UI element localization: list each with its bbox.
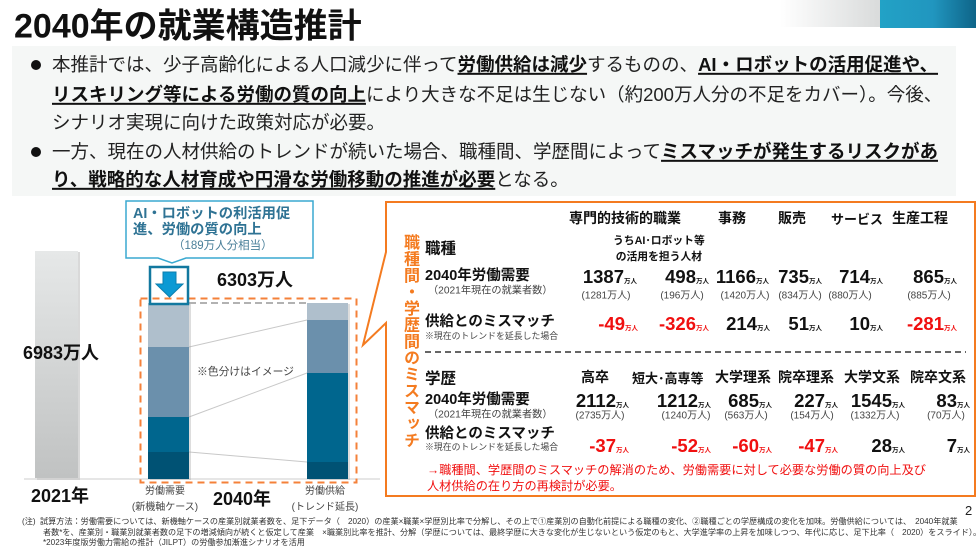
label: supply bar: 労働供給 <box>305 486 345 497</box>
occupation demand values: (880万人) <box>828 290 872 302</box>
education demand values: 685万人 <box>728 390 772 411</box>
occupation demand values: 865万人 <box>913 266 957 287</box>
education mismatch values <box>589 435 970 456</box>
AI robot subcolumn note <box>613 234 705 263</box>
footnote: *2023年度版労働力需給の推計（JILPT）の労働参加漸進シナリオを活用 <box>43 538 305 547</box>
title: 2040年の就業構造推計 <box>14 7 362 45</box>
text: bullet 2 line 1: 一方、現在の人材供給のトレンドが続いた場合、職種間、学歴間によってミスマッチが発生するリスクがあ <box>52 141 938 162</box>
label: supply bar <box>292 485 358 513</box>
occupation demand values: 714万人 <box>839 266 883 287</box>
footnote <box>22 517 976 547</box>
2021 bar <box>35 251 80 480</box>
education demand values: (70万人) <box>927 410 965 422</box>
education demand row label: 2040年労働需要 <box>425 392 530 408</box>
callout text: 進、労働の質の向上 <box>133 222 262 238</box>
education table <box>425 369 970 456</box>
occupation mismatch values: 51万人 <box>788 313 822 334</box>
bullet 2 marker <box>31 147 41 157</box>
callout text: AI・ロボットの利活用促 <box>133 206 290 222</box>
conclusion text in red: →職種間、学歴間のミスマッチの解消のため、労働需要に対して必要な労働の質の向上及び <box>427 463 926 477</box>
education mismatch values: -37万人 <box>589 435 629 456</box>
education column headers: 高卒 <box>581 369 609 385</box>
occupation mismatch row label: ※現在のトレンドを延長した場合 <box>425 331 558 341</box>
occupation demand values: 735万人 <box>778 266 822 287</box>
text: bullet 2 line 2: り、戦略的な人材育成や円滑な労働移動の推進が必要となる。 <box>52 169 569 190</box>
education demand values: (1332万人) <box>851 410 899 422</box>
education column headers <box>581 369 966 386</box>
text: bullet 1 line 1: 本推計では、少子高齢化による人口減少に伴って労働供給は減少するものの、AI・ロボットの活用促進や、 <box>52 54 938 75</box>
education column headers: 院卒理系 <box>778 369 834 385</box>
label: demand bar: (新機軸ケース) <box>132 502 198 513</box>
label: 2040: 2040年 <box>213 489 271 509</box>
label: supply bar: (トレンド延長) <box>292 502 358 513</box>
conclusion text in red <box>427 463 926 493</box>
occupation column headers <box>569 210 948 227</box>
occupation demand values: (834万人) <box>778 290 822 302</box>
education demand values: 83万人 <box>936 390 970 411</box>
education demand row label: （2021年現在の就業者数） <box>428 409 553 420</box>
bullet 1 marker <box>31 60 41 70</box>
education column headers: 大学文系 <box>844 369 900 385</box>
education mismatch values: 7万人 <box>947 435 970 456</box>
education column headers: 短大･高専等 <box>632 371 704 386</box>
demand bar <box>148 303 191 480</box>
occupation demand values: (1420万人) <box>721 290 769 302</box>
occupation mismatch row label: 供給とのミスマッチ <box>425 314 555 330</box>
occupation mismatch values: -49万人 <box>598 313 638 334</box>
occupation demand values: 498万人 <box>665 266 709 287</box>
education demand values: (1240万人) <box>662 410 710 422</box>
education mismatch values: -47万人 <box>798 435 838 456</box>
education heading: 学歴 <box>425 370 456 387</box>
occupation mismatch values: 214万人 <box>726 313 770 334</box>
occupation mismatch values: 10万人 <box>849 313 883 334</box>
callout text <box>133 206 290 252</box>
education demand row label <box>425 391 553 420</box>
education mismatch row label: ※現在のトレンドを延長した場合 <box>425 442 558 452</box>
occupation demand row label: （2021年現在の就業者数） <box>428 285 553 296</box>
label: demand bar <box>132 485 198 513</box>
education demand values: 1212万人 <box>657 390 711 411</box>
panel outline with speech pointer <box>363 202 975 496</box>
label: 6303: 6303万人 <box>217 270 293 290</box>
occupation mismatch values: -326万人 <box>659 313 709 334</box>
education mismatch values: -60万人 <box>732 435 772 456</box>
icon: down arrow in box <box>150 267 188 304</box>
occupation column headers: 生産工程 <box>892 210 948 226</box>
education column headers: 院卒文系 <box>910 369 966 385</box>
label: demand bar: 労働需要 <box>145 486 185 497</box>
label: color note: ※色分けはイメージ <box>197 366 294 378</box>
education demand values: 227万人 <box>794 390 838 411</box>
connector lines <box>189 303 307 462</box>
education demand values: 2112万人 <box>576 390 629 411</box>
occupation demand values: (885万人) <box>907 290 951 302</box>
education mismatch values: -52万人 <box>671 435 711 456</box>
dashed divider <box>425 351 966 353</box>
occupation mismatch row label <box>425 313 558 341</box>
footnote: (注) 試算方法：労働需要については、新機軸ケースの産業別就業者数を、足下データ（ 2020）の産業×職業×学歴別比率で分解し、その上で①産業別の自動化前提による職種の変化、②職種ごとの学歴構成の変化を加味。労働供給については、 2040年就業 <box>22 517 958 526</box>
occupation demand values: 1166万人 <box>716 266 769 287</box>
education mismatch row label <box>425 425 558 452</box>
occupation column headers: 販売 <box>778 210 806 226</box>
education column headers: 大学理系 <box>715 369 771 385</box>
conclusion text in red: 人材供給の在り方の再検討が必要。 <box>427 479 622 493</box>
education demand values: (563万人) <box>724 410 768 422</box>
AI robot subcolumn note: うちAI･ロボット等 <box>613 235 705 247</box>
education demand values: (2735万人) <box>576 410 624 422</box>
occupation demand values: (1281万人) <box>582 290 630 302</box>
occupation table <box>425 210 957 341</box>
supply bar <box>307 303 350 480</box>
page number: 2 <box>965 503 972 518</box>
vertical label: mismatch: 職種間・学歴間のミスマッチ <box>401 234 418 448</box>
occupation mismatch values: -281万人 <box>907 313 957 334</box>
occupation column headers: サービス <box>831 212 883 227</box>
occupation demand values <box>582 266 957 302</box>
text: bullet 1 line 3: シナリオ実現に向けた政策対応が必要。 <box>52 112 385 133</box>
occupation demand row label <box>425 267 553 296</box>
occupation heading: 職種 <box>425 240 456 257</box>
education mismatch values: 28万人 <box>871 435 905 456</box>
education demand values: 1545万人 <box>851 390 905 411</box>
education demand values <box>576 390 970 422</box>
callout text: （189万人分相当） <box>173 240 273 252</box>
panel: summary bullets <box>12 46 956 196</box>
baseline <box>24 478 380 480</box>
education demand values: (154万人) <box>790 410 834 422</box>
occupation mismatch values <box>598 313 957 334</box>
callout box <box>126 201 313 263</box>
occupation demand values: 1387万人 <box>583 266 637 287</box>
occupation column headers: 事務 <box>718 210 746 226</box>
education mismatch row label: 供給とのミスマッチ <box>425 426 555 442</box>
occupation demand row label: 2040年労働需要 <box>425 268 530 284</box>
label: 6983: 6983万人 <box>23 343 99 363</box>
footnote: 者数*を、産業別・職業別就業者数の足下の増減傾向が続くと仮定して産業 ×職業別比率を推計、分解（学歴については、最終学歴に大きな変化が生じないという仮定のもと、大学進学率の上昇を加味しつつ、年代に応じ、足下比率（ 2020）をスライド）。 <box>43 528 976 536</box>
AI robot subcolumn note: の活用を担う人材 <box>616 251 702 263</box>
label: 2021: 2021年 <box>31 486 89 506</box>
top right decorative header block <box>802 0 976 28</box>
text: bullet 1 line 2: リスキリング等による労働の質の向上により大きな不足は生じない（約200万人分の不足をカバー）。今後、 <box>52 84 942 105</box>
dashed highlight around 2040 bars <box>140 298 356 482</box>
occupation column headers: 専門的技術的職業 <box>569 210 681 226</box>
occupation demand values: (196万人) <box>660 290 704 302</box>
